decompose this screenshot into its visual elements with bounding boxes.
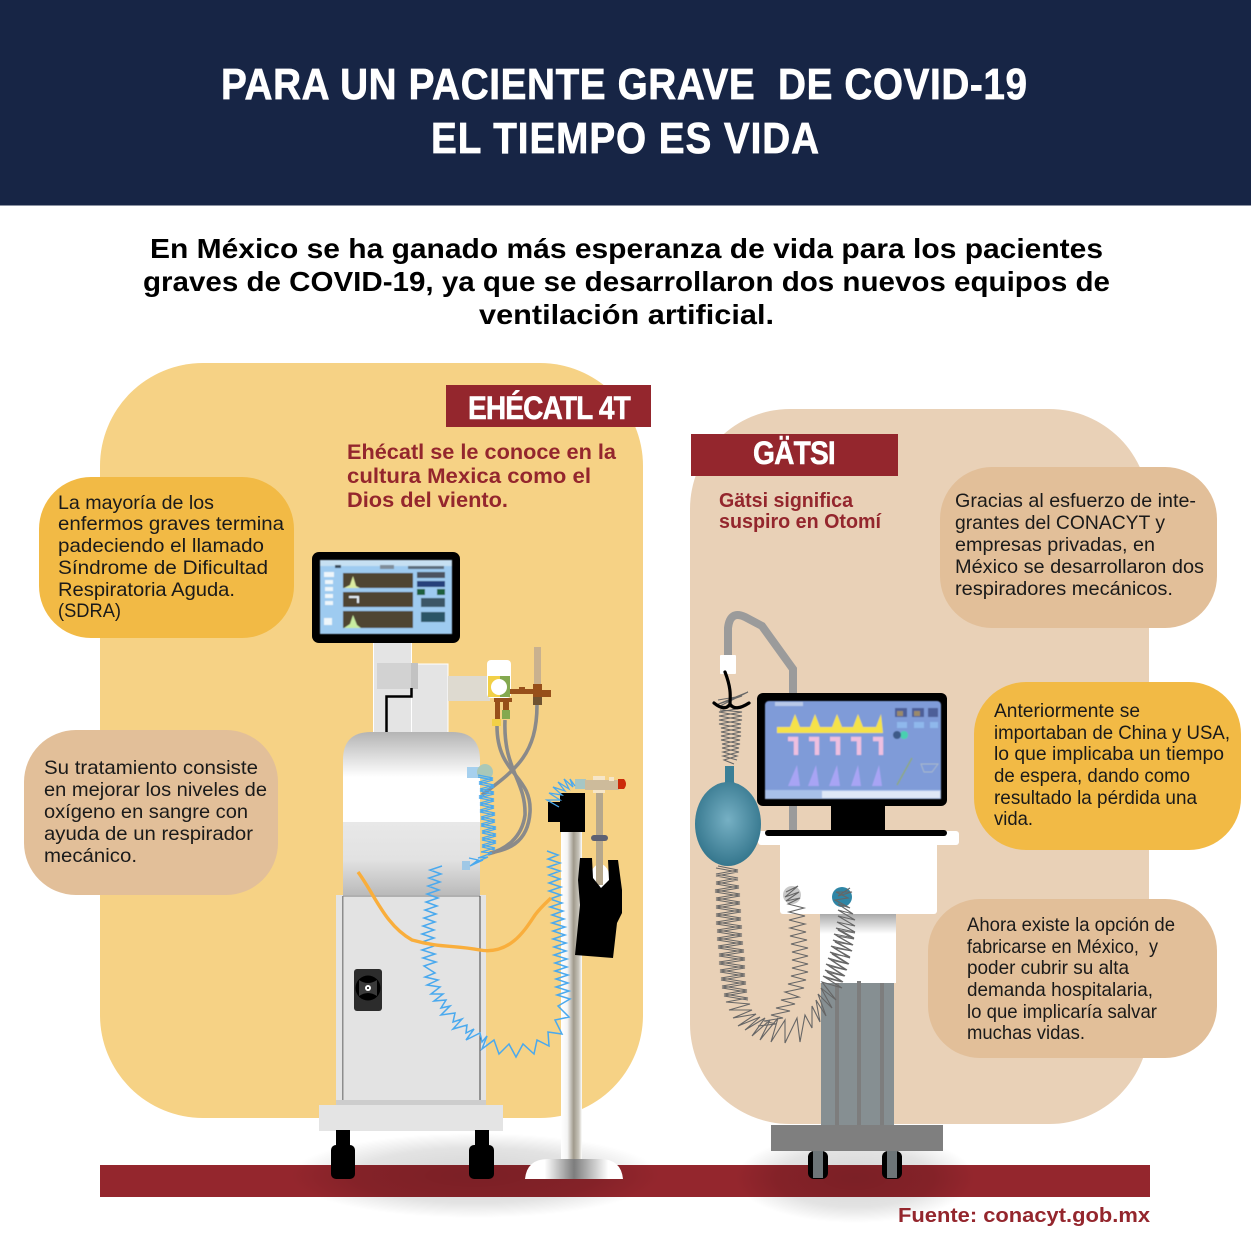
floor bar: [100, 1165, 1150, 1197]
black bag: [575, 790, 622, 958]
label: Gätsi: GÄTSI: [753, 436, 836, 471]
base: [771, 1125, 943, 1151]
black hook: [714, 672, 749, 708]
callout: fabricación en México: poder cubrir su alta: [967, 957, 1129, 979]
callout: SDRA: (SDRA): [58, 600, 121, 622]
gray tubes: [482, 705, 537, 854]
callout: esfuerzo CONACYT: Gracias al esfuerzo de inte-: [955, 490, 1196, 512]
text: Gätsi meaning: [719, 490, 882, 533]
corrugated hose: upper: [716, 692, 748, 764]
intro text: graves de COVID-19, ya que se desarrollaron dos nuevos equipos de: [143, 266, 1110, 297]
text: Gätsi meaning: suspiro en Otomí: [719, 511, 882, 533]
callout: tratamiento: mecánico.: [44, 845, 137, 867]
label: Gätsi: [691, 434, 898, 476]
source: Fuente: conacyt.gob.mx: [898, 1204, 1151, 1227]
connector: lower port: [462, 861, 470, 870]
callout: SDRA: La mayoría de los: [58, 492, 214, 514]
intro text: [143, 233, 1110, 330]
label: Ehécatl 4T: EHÉCATL 4T: [468, 390, 631, 426]
callout: tratamiento: en mejorar los niveles de: [44, 779, 267, 801]
callout: esfuerzo CONACYT: empresas privadas, en: [955, 534, 1155, 556]
callout: tratamiento: [24, 730, 278, 895]
callout: esfuerzo CONACYT: respiradores mecánicos.: [955, 578, 1173, 600]
callout: fabricación en México: muchas vidas.: [967, 1022, 1085, 1044]
monitor: [312, 552, 460, 643]
panel: Gätsi background: [690, 409, 1149, 1124]
title: [221, 59, 1027, 163]
bulb: [695, 766, 761, 866]
text: Gätsi meaning: Gätsi significa: [719, 490, 854, 512]
text: Ehécatl meaning: Ehécatl se le conoce en la: [347, 441, 616, 464]
blue corrugated hose: side: [469, 775, 496, 866]
callout: esfuerzo CONACYT: [940, 467, 1217, 628]
title: EL TIEMPO ES VIDA: [431, 113, 819, 163]
corrugated hose: left: [715, 866, 855, 1043]
callout: tratamiento: ayuda de un respirador: [44, 823, 254, 845]
floor shadow: Gätsi: [735, 1133, 975, 1223]
ventilator: Gätsi: [695, 615, 959, 1179]
callout: importación: [974, 682, 1241, 850]
callout: importación: de espera, dando como: [994, 765, 1190, 787]
floor shadow: Ehécatl: [290, 1133, 660, 1218]
orange cable: [358, 872, 551, 951]
callout: importación: resultado la pérdida una: [994, 787, 1197, 809]
callout: tratamiento: Su tratamiento consiste: [44, 757, 258, 779]
callout: importación: vida.: [994, 808, 1033, 830]
white clip: [720, 655, 736, 674]
text: Ehécatl meaning: Dios del viento.: [347, 489, 508, 512]
callout: fabricación en México: fabricarse en México, y: [967, 936, 1158, 958]
header band: [0, 0, 1251, 206]
callout: SDRA: [39, 477, 294, 638]
gray tube: [728, 615, 793, 832]
callout: tratamiento: oxígeno en sangre con: [44, 801, 248, 823]
title: PARA UN PACIENTE GRAVE DE COVID-19: [221, 59, 1027, 109]
monitor stand: [765, 805, 947, 836]
corrugated hose: right: [758, 886, 808, 1026]
label: Ehécatl 4T: [446, 385, 651, 427]
blue corrugated hose: top: [547, 779, 575, 807]
callout: importación: lo que implicaba un tiempo: [994, 743, 1224, 765]
connector: upper port: [467, 764, 493, 780]
machine arm: [448, 676, 490, 701]
ventilator: Ehécatl 4T: [312, 552, 626, 1179]
intro text: En México se ha ganado más esperanza de vida para los pacientes: [150, 233, 1103, 264]
IV pole: [525, 830, 623, 1179]
socket: [354, 969, 382, 1011]
white cart: [758, 831, 959, 914]
callout: SDRA: Respiratoria Aguda.: [58, 579, 235, 601]
oxygen valve: [487, 647, 551, 726]
clamp: [548, 793, 585, 832]
text: Ehécatl meaning: [347, 441, 616, 512]
text: Ehécatl meaning: cultura Mexica como el: [347, 465, 591, 488]
callout: importación: importaban de China y USA,: [994, 722, 1230, 744]
callout: esfuerzo CONACYT: grantes del CONACYT y: [955, 512, 1165, 534]
callout: fabricación en México: lo que implicaría salvar: [967, 1001, 1157, 1023]
callout: SDRA: enfermos graves termina: [58, 513, 284, 535]
callout: SDRA: padeciendo el llamado: [58, 535, 264, 557]
callout: fabricación en México: Ahora existe la opción de: [967, 914, 1175, 936]
monitor stand: [374, 642, 448, 733]
tee connector: [575, 776, 626, 793]
column: [820, 913, 896, 1125]
wheels: [331, 1130, 494, 1179]
intro text: ventilación artificial.: [479, 299, 774, 330]
machine cabinet: [319, 895, 503, 1131]
wheels: [808, 1151, 902, 1179]
monitor: [757, 693, 947, 806]
callout: SDRA: Síndrome de Dificultad: [58, 557, 268, 579]
blue corrugated hose: main: [422, 851, 570, 1057]
callout: fabricación en México: [928, 899, 1217, 1058]
panel: Ehécatl background: [100, 363, 643, 1118]
callout: fabricación en México: demanda hospitalaria,: [967, 979, 1153, 1001]
machine body: [343, 732, 480, 897]
callout: esfuerzo CONACYT: México se desarrollaron dos: [955, 556, 1204, 578]
callout: importación: Anteriormente se: [994, 700, 1140, 722]
